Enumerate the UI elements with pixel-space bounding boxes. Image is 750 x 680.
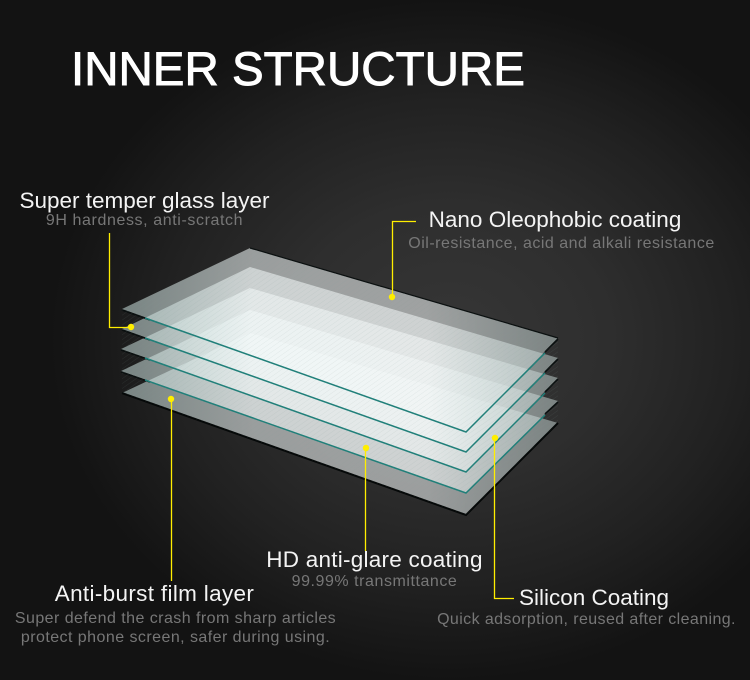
label: HD anti-glare coating: 99.99% transmittance <box>292 573 457 590</box>
layer 1: top plate <box>122 248 558 432</box>
callout line: super temper glass <box>110 233 134 330</box>
label: super temper glass layer: 9H hardness, anti-scratch <box>46 212 243 229</box>
label: silicon coating <box>437 585 736 628</box>
label: silicon coating: Quick adsorption, reused after cleaning. <box>437 611 736 628</box>
label: nano oleophobic coating <box>408 207 715 252</box>
title: INNER STRUCTURE <box>71 43 525 96</box>
callout line: nano oleophobic <box>389 222 416 300</box>
glass texture <box>122 248 558 515</box>
callout line: anti-burst <box>168 396 174 581</box>
label: nano oleophobic coating: Nano Oleophobic coating <box>429 207 681 232</box>
label: super temper glass layer: Super temper glass layer <box>19 188 270 213</box>
label: anti-burst film layer: protect phone screen, safer during using. <box>21 629 330 646</box>
label: anti-burst film layer: Anti-burst film layer <box>55 581 254 606</box>
layer 3 <box>121 288 558 472</box>
label: anti-burst film layer: Super defend the crash from sharp articles <box>15 610 336 627</box>
label: silicon coating: Silicon Coating <box>519 585 669 610</box>
label: super temper glass layer <box>19 188 270 229</box>
layer 5: bottom plate <box>122 333 558 515</box>
label: nano oleophobic coating: Oil-resistance, acid and alkali resistance <box>408 234 715 252</box>
callout line: silicon coating <box>492 435 514 598</box>
layer 2 <box>122 267 558 452</box>
label: HD anti-glare coating: HD anti-glare coating <box>266 547 483 572</box>
label: anti-burst film layer <box>15 581 336 646</box>
layer 4 <box>121 310 558 493</box>
callout line: HD anti-glare <box>363 445 369 551</box>
label: HD anti-glare coating <box>266 547 483 590</box>
